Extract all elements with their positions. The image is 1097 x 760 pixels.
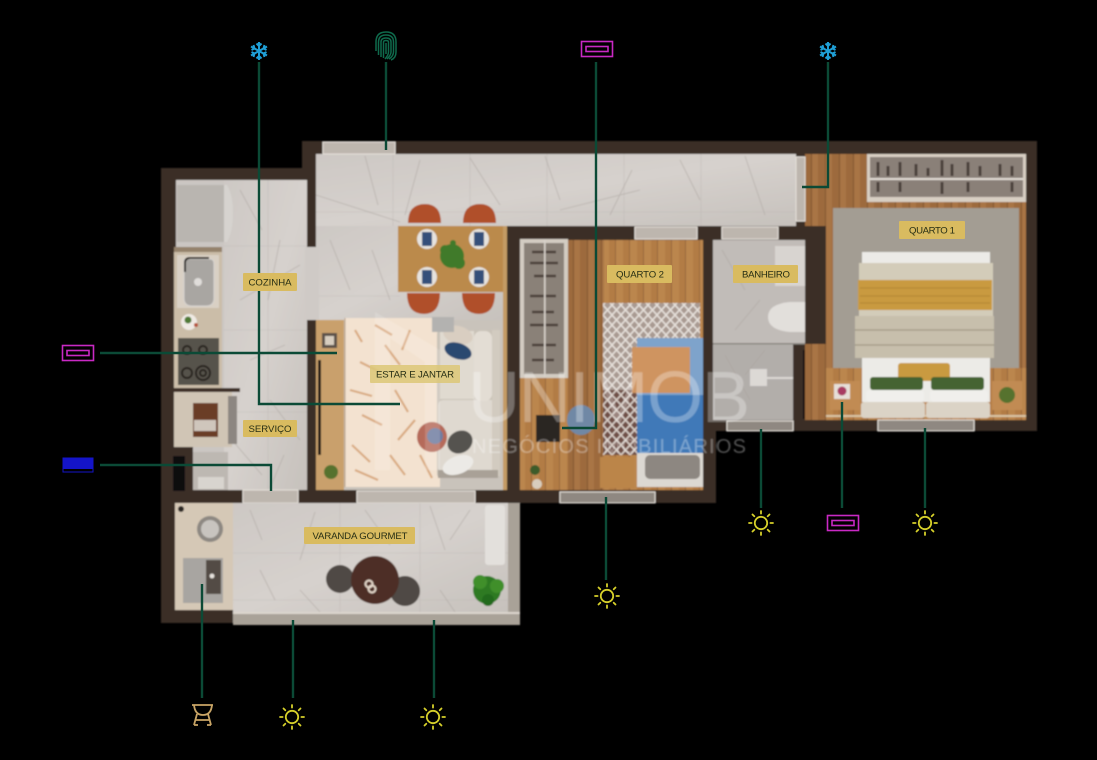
- label: varanda gourmet: VARANDA GOURMET: [312, 531, 408, 542]
- panel: service area: [173, 388, 240, 491]
- bed: [855, 252, 994, 418]
- icon: outlet living: [62, 346, 94, 360]
- sink: [775, 240, 812, 290]
- label: quarto 2: [607, 265, 672, 283]
- label: cozinha: COZINHA: [248, 278, 292, 288]
- sofa: [437, 330, 500, 478]
- label: serviço: SERVIÇO: [248, 424, 292, 435]
- panel: kitchen floor: [176, 180, 319, 490]
- panel: gourmet counter: [175, 503, 233, 610]
- icon: fingerprint: [376, 32, 396, 60]
- icon: heater service: [62, 458, 94, 472]
- watermark logo: [375, 312, 750, 470]
- panel: hall floor: [316, 154, 796, 320]
- panel: dining table: [398, 204, 503, 314]
- icon: outlet quarto 1: [828, 516, 858, 530]
- rug: [833, 208, 1019, 368]
- label: estar e jantar: ESTAR E JANTAR: [376, 370, 454, 380]
- icon: sun quarto 2: [595, 584, 619, 608]
- label: banheiro: BANHEIRO: [742, 270, 790, 280]
- icon: snowflake quarto 1: [820, 42, 836, 60]
- plant: [473, 575, 504, 606]
- icon: sun quarto 1: [913, 511, 937, 535]
- desk: [530, 405, 595, 489]
- icon: barbecue grill: [192, 705, 213, 725]
- icon: sun banheiro: [749, 511, 773, 535]
- label: cozinha: [243, 273, 297, 291]
- shower fixture: [750, 369, 793, 386]
- round table: [326, 556, 420, 606]
- watermark logo: NEGÓCIOS IMOBILIÁRIOS: [472, 435, 746, 458]
- panel: quarto 1: [805, 154, 1026, 420]
- panel: varanda gourmet: [233, 503, 520, 625]
- label: estar e jantar: [370, 365, 460, 383]
- rug: [345, 318, 440, 487]
- icon: fridge: [177, 185, 233, 242]
- panel: windows and doors: [243, 142, 974, 503]
- watermark logo: UNIMOB: [468, 358, 750, 438]
- nightstands: [830, 381, 1022, 410]
- label: banheiro: [733, 265, 798, 283]
- wardrobe: [520, 239, 568, 378]
- nightstand: [600, 457, 634, 488]
- floor plan: [161, 141, 1037, 625]
- label: quarto 2: QUARTO 2: [616, 270, 664, 280]
- panel: banheiro: [713, 240, 814, 420]
- panel: living room: [316, 226, 507, 490]
- tv console: [316, 320, 344, 490]
- rug: [603, 303, 700, 455]
- label: quarto 1: QUARTO 1: [909, 226, 955, 236]
- connector lines: [100, 62, 925, 698]
- icon: sun varanda right: [421, 705, 445, 729]
- label: serviço: [243, 420, 297, 437]
- icon: outlet quarto 2: [582, 42, 612, 56]
- wardrobe: [867, 154, 1026, 202]
- pillows and side table: [417, 317, 477, 479]
- label: varanda gourmet: [304, 527, 415, 544]
- icon: snowflake kitchen: [251, 42, 267, 60]
- room labels: [243, 221, 965, 544]
- icon: sun varanda left: [280, 705, 304, 729]
- walls outline: [161, 141, 1037, 625]
- label: quarto 1: [899, 221, 965, 239]
- shaft: [803, 350, 814, 419]
- toilet: [768, 302, 812, 332]
- panel: kitchen counter: [174, 247, 222, 388]
- panel: quarto 2: [520, 239, 703, 490]
- bed: [632, 338, 703, 487]
